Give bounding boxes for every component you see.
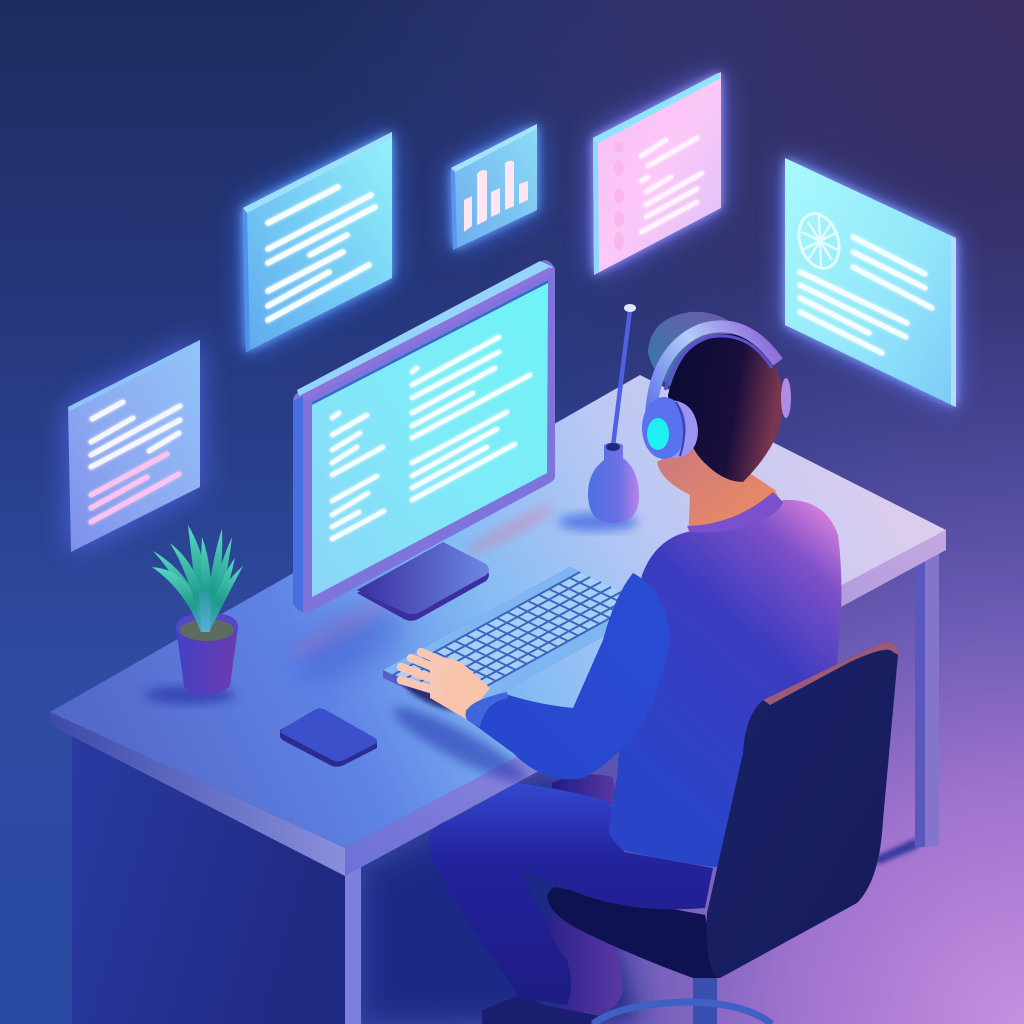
keyboard — [383, 567, 655, 717]
person — [401, 312, 842, 1024]
plant leaves — [152, 525, 243, 632]
hand — [401, 652, 490, 719]
chair highlight edge — [763, 642, 898, 705]
torso sweater — [609, 500, 842, 867]
desk front edge right — [345, 530, 946, 876]
monitor stand — [357, 542, 489, 621]
neck — [657, 445, 785, 540]
desk shadows — [285, 499, 558, 793]
panel: floating pink list window — [593, 72, 721, 275]
arm — [466, 573, 670, 779]
chair base — [593, 1002, 772, 1024]
shoe — [482, 995, 600, 1024]
chair — [593, 642, 898, 1024]
under-desk shadow — [361, 770, 640, 1024]
chair post — [693, 978, 717, 1024]
head back cap — [648, 312, 735, 395]
panel: floating window far left — [68, 340, 200, 552]
chair seat — [547, 887, 720, 978]
far leg — [530, 775, 622, 1018]
icon: smartphone — [280, 708, 377, 767]
hair — [668, 334, 783, 482]
panel: floating image and text window right — [785, 158, 956, 407]
sweater collar — [687, 492, 783, 533]
monitor — [293, 260, 555, 621]
desk front leg — [345, 866, 361, 1024]
headphones band — [651, 326, 778, 415]
near leg — [428, 783, 713, 1005]
desk — [50, 375, 946, 1024]
headphones right cup — [781, 378, 791, 418]
desk front edge left — [50, 712, 345, 876]
desk side panel — [72, 736, 345, 1024]
headphones ear cup — [642, 397, 698, 459]
icon: potted plant — [145, 525, 243, 704]
desk top surface — [50, 375, 946, 848]
monitor screen — [312, 280, 548, 597]
panel: floating text window upper left — [243, 132, 392, 352]
chair back — [707, 642, 898, 978]
icon: antenna bottle — [558, 304, 639, 531]
sleeve cuff — [466, 692, 508, 727]
bar chart — [464, 161, 528, 232]
desk right leg — [868, 546, 939, 864]
plant pot — [176, 613, 238, 695]
panel: floating bar chart window — [451, 124, 537, 250]
keyboard keys — [393, 572, 641, 704]
icon: round citrus image — [792, 208, 846, 274]
